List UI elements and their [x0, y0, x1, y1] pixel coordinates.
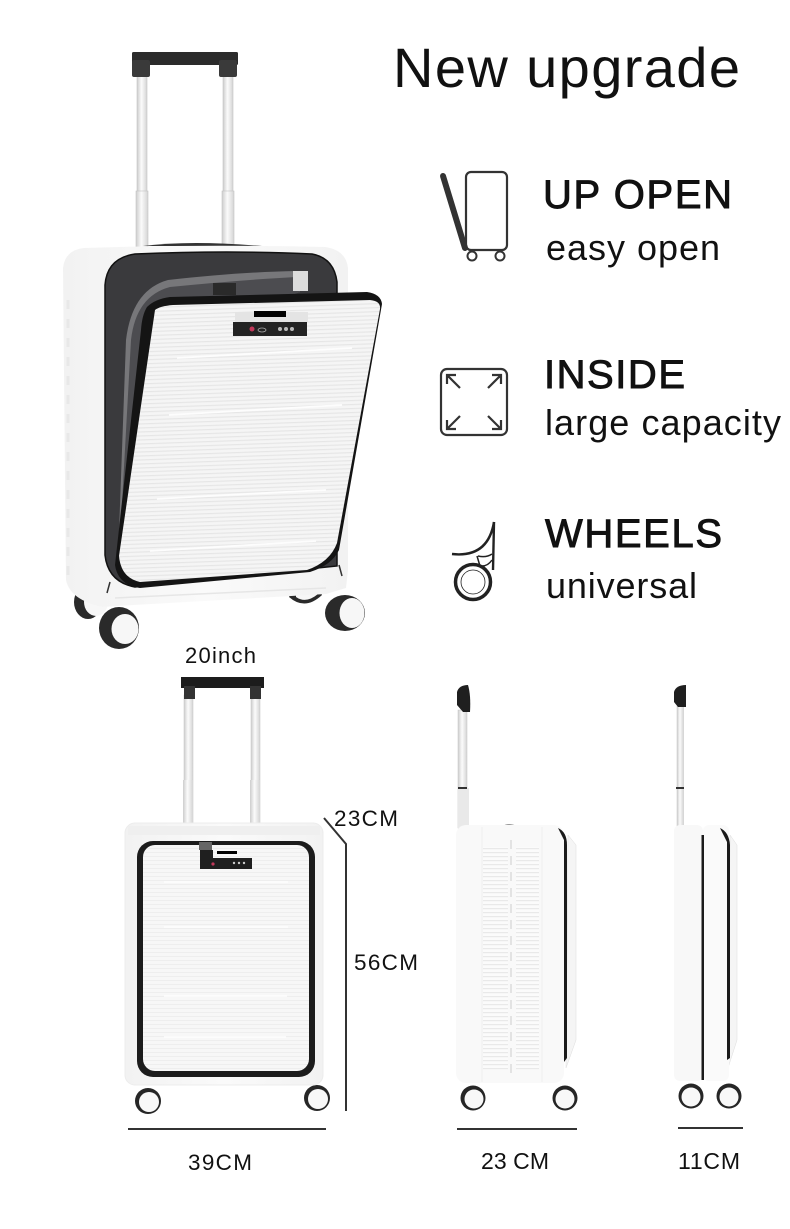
main suitcase photo: opened front lid [63, 52, 382, 649]
feature: up open: easy open [546, 227, 720, 268]
thin side view suitcase [674, 685, 742, 1108]
telescopic handle [132, 52, 262, 248]
dark interior [105, 252, 337, 587]
side view suitcase [456, 685, 578, 1110]
dimension: depth and height: 23CM [334, 806, 398, 831]
feature: inside: INSIDE [544, 353, 685, 397]
feature: up open: UP OPEN [543, 173, 732, 217]
front lid [115, 292, 382, 588]
front wheels [99, 565, 365, 649]
lid ridges [150, 348, 352, 551]
feature: inside [441, 353, 781, 443]
front lid [137, 841, 315, 1077]
lock [199, 842, 252, 869]
dimension: depth and height: 56CM [354, 950, 418, 975]
dimension: width: 39CM [188, 1150, 252, 1175]
feature: inside: large capacity [545, 402, 781, 443]
shell [125, 823, 323, 1085]
size label: 20inch [185, 643, 256, 668]
feature: wheels: WHEELS [545, 512, 722, 556]
shell body [63, 246, 348, 607]
dimension: closed depth: 11CM [678, 1148, 740, 1174]
icon: expand arrows [441, 369, 507, 435]
wheels [135, 1085, 330, 1114]
icon: opening suitcase [443, 172, 507, 260]
rear wheels [74, 585, 322, 619]
inner pocket [118, 271, 300, 560]
combination lock [233, 311, 308, 336]
title: New upgrade [393, 36, 740, 99]
dimension: side depth [457, 1128, 577, 1174]
zipper and strap [213, 283, 236, 295]
handle [178, 677, 268, 829]
feature: wheels [452, 512, 722, 606]
dimension: closed depth [678, 1127, 743, 1174]
icon: spinner wheel [452, 522, 494, 600]
feature: wheels: universal [546, 565, 697, 606]
dimension: depth and height [324, 806, 418, 1111]
front view suitcase [125, 677, 330, 1114]
dimension: side depth: 23 CM [481, 1148, 549, 1174]
feature: up open [443, 172, 732, 268]
